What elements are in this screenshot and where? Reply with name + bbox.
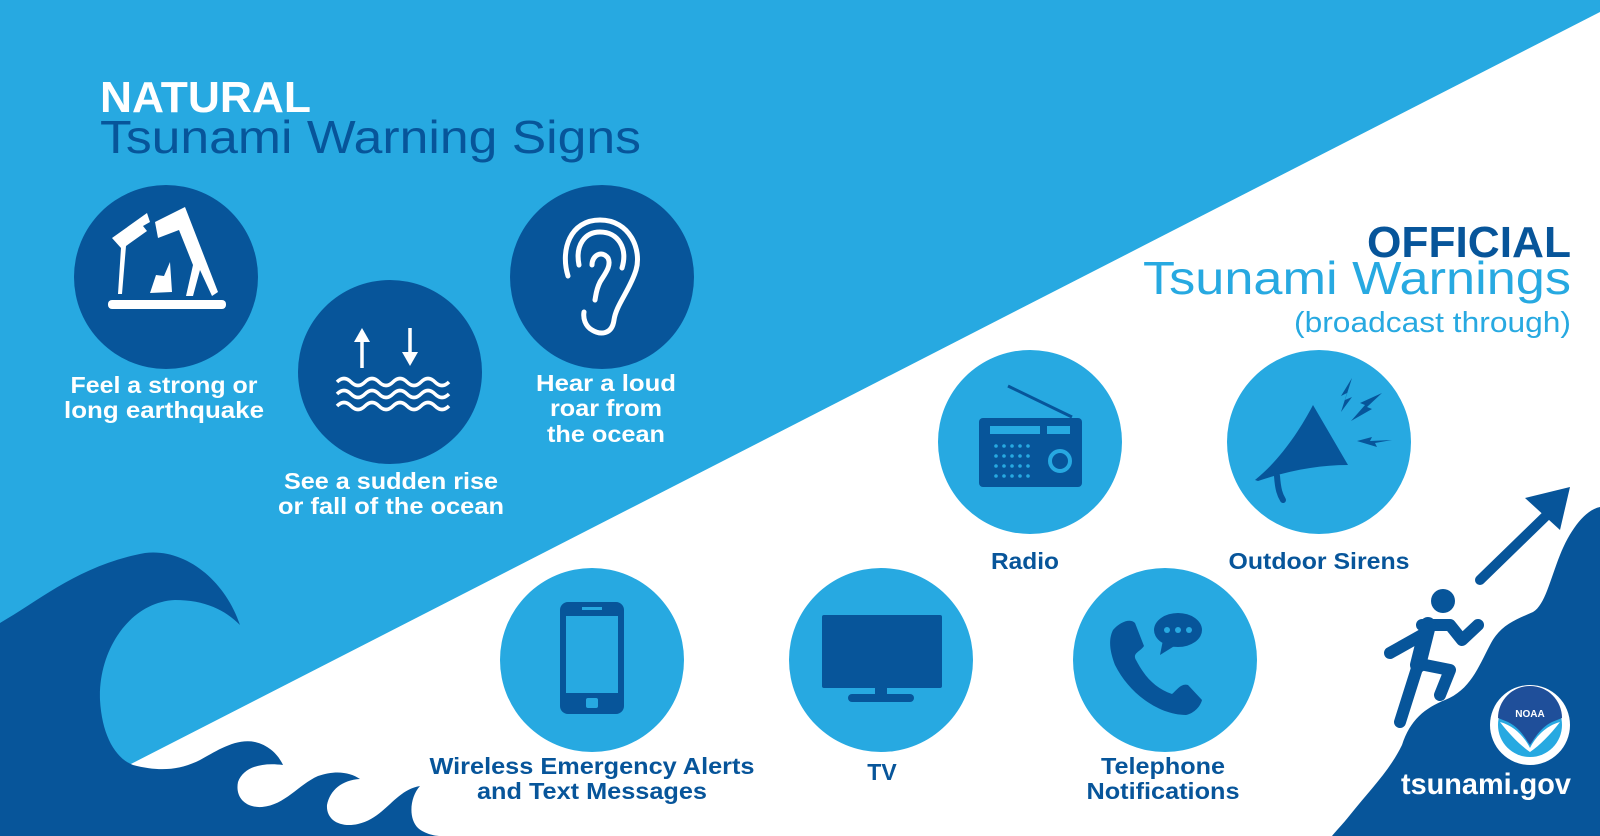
panel: ocean rise/fall: or fall of the ocean bbox=[278, 493, 504, 519]
NOAA logo bbox=[1490, 685, 1570, 765]
panel: tv bbox=[789, 568, 973, 785]
icon: broken house bbox=[108, 207, 226, 309]
panel: ocean rise/fall bbox=[278, 280, 504, 519]
panel: earthquake bbox=[64, 185, 264, 423]
panel: ear: the ocean bbox=[547, 421, 665, 447]
NOAA logo: NOAA bbox=[1515, 709, 1545, 720]
panel: wireless alerts: and Text Messages bbox=[477, 778, 707, 804]
title: natural bbox=[100, 73, 641, 163]
arrow bbox=[1480, 487, 1570, 580]
icon: radio bbox=[979, 386, 1082, 487]
panel: wireless alerts: Wireless Emergency Alerts bbox=[430, 753, 754, 779]
title: official bbox=[1143, 218, 1571, 339]
mountain with runner bbox=[1332, 487, 1600, 836]
panel: ear: roar from bbox=[550, 395, 662, 421]
title: official: (broadcast through) bbox=[1294, 307, 1571, 339]
panel: wireless alerts bbox=[430, 568, 754, 804]
icon: arrows and waves bbox=[337, 328, 449, 410]
panel: radio: Radio bbox=[991, 548, 1059, 574]
panel: tv: TV bbox=[867, 759, 897, 785]
panel: telephone: Notifications bbox=[1086, 778, 1240, 804]
panel: ocean rise/fall: See a sudden rise bbox=[284, 468, 498, 494]
title: official: OFFICIAL bbox=[1367, 218, 1571, 267]
runner bbox=[1390, 589, 1478, 722]
panel: telephone: Telephone bbox=[1101, 753, 1225, 779]
panel: earthquake: long earthquake bbox=[64, 397, 264, 423]
panel: radio bbox=[938, 350, 1122, 574]
title: official: Tsunami Warnings bbox=[1143, 252, 1571, 304]
panel: sirens: Outdoor Sirens bbox=[1228, 548, 1410, 574]
panel: ear bbox=[510, 185, 694, 447]
icon: phone bbox=[560, 602, 624, 714]
panel: sirens bbox=[1227, 350, 1411, 574]
icon: phone handset with bubble bbox=[1110, 613, 1202, 715]
icon: megaphone bbox=[1255, 378, 1392, 500]
panel: earthquake: Feel a strong or bbox=[70, 372, 258, 398]
panel: telephone bbox=[1073, 568, 1257, 804]
big wave bbox=[0, 552, 440, 836]
panel: ear: Hear a loud bbox=[536, 370, 676, 396]
url: tsunami.gov bbox=[1401, 768, 1571, 801]
icon: tv bbox=[822, 615, 942, 702]
title: natural: NATURAL bbox=[100, 73, 311, 122]
icon: ear bbox=[565, 220, 638, 333]
title: natural: Tsunami Warning Signs bbox=[100, 111, 641, 163]
